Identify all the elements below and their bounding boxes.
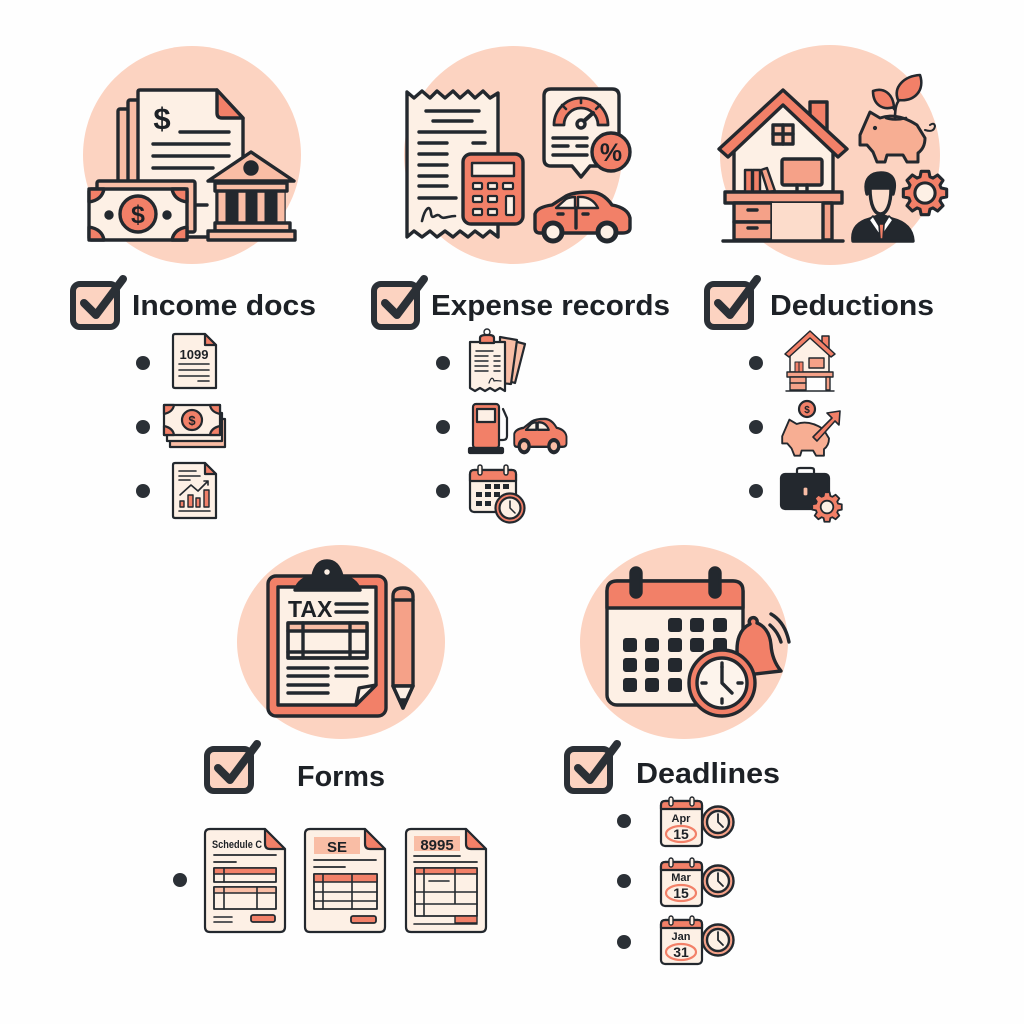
icon: check box	[707, 279, 757, 327]
icon: receipts	[470, 329, 525, 391]
icon: home office	[785, 331, 835, 391]
list: deduction items	[749, 331, 842, 522]
icon: April 15: Apr	[672, 813, 691, 825]
icon: cash stack: $	[188, 413, 196, 428]
icon: tax clipboard hero	[237, 545, 445, 739]
icon: March 15: Mar	[671, 872, 691, 884]
icon: expense records hero	[404, 46, 630, 264]
icon: SE form: SE	[327, 839, 347, 856]
icon: April 15	[661, 797, 734, 846]
icon: piggy bank with arrow: $	[804, 405, 810, 416]
icon: check box	[207, 744, 257, 791]
icon: January 31: 31	[673, 944, 689, 960]
icon: March 15: 15	[673, 885, 689, 901]
icon: expense records hero: %	[600, 139, 622, 167]
icon: income documents hero: $	[153, 101, 171, 136]
heading: expense records: Expense records	[431, 290, 670, 322]
icon: cash stack	[164, 405, 225, 447]
icon: schedule C form: Schedule C	[212, 839, 262, 851]
icon: tax clipboard hero: TAX	[288, 596, 333, 622]
panel: deadlines	[567, 545, 789, 964]
icon: SE form	[305, 829, 385, 932]
panel: income docs	[73, 46, 316, 518]
list: expense items	[436, 329, 566, 522]
list: tax forms	[173, 829, 486, 932]
list: income items	[136, 334, 225, 518]
heading: deductions: Deductions	[770, 290, 934, 322]
icon: briefcase and gear	[781, 468, 842, 522]
icon: income documents hero	[83, 46, 301, 264]
icon: January 31: Jan	[672, 931, 691, 943]
heading: forms: Forms	[297, 761, 385, 793]
icon: report with chart	[173, 463, 216, 518]
icon: fuel pump and car	[469, 404, 566, 453]
icon: deductions hero	[719, 45, 947, 265]
icon: schedule C form	[205, 829, 285, 932]
icon: 8995 form: 8995	[420, 837, 454, 854]
icon: piggy bank with arrow	[782, 401, 840, 456]
icon: check box	[73, 279, 123, 327]
heading: income docs: Income docs	[132, 290, 316, 322]
icon: 1099 form	[173, 334, 216, 388]
icon: check box	[567, 744, 617, 791]
icon: 8995 form	[406, 829, 486, 932]
icon: calendar, clock and bell hero	[580, 545, 789, 739]
icon: April 15: 15	[673, 826, 689, 842]
icon: calendar with clock	[470, 465, 524, 522]
list: deadline dates	[617, 797, 734, 964]
icon: January 31	[661, 916, 734, 964]
panel: expense records	[374, 46, 670, 522]
panel: forms	[173, 545, 486, 932]
icon: income documents hero: $	[131, 201, 145, 229]
icon: March 15	[661, 858, 734, 906]
heading: deadlines: Deadlines	[636, 758, 780, 790]
panel: deductions	[707, 45, 947, 522]
icon: 1099 form: 1099	[180, 347, 208, 362]
icon: check box	[374, 279, 424, 327]
